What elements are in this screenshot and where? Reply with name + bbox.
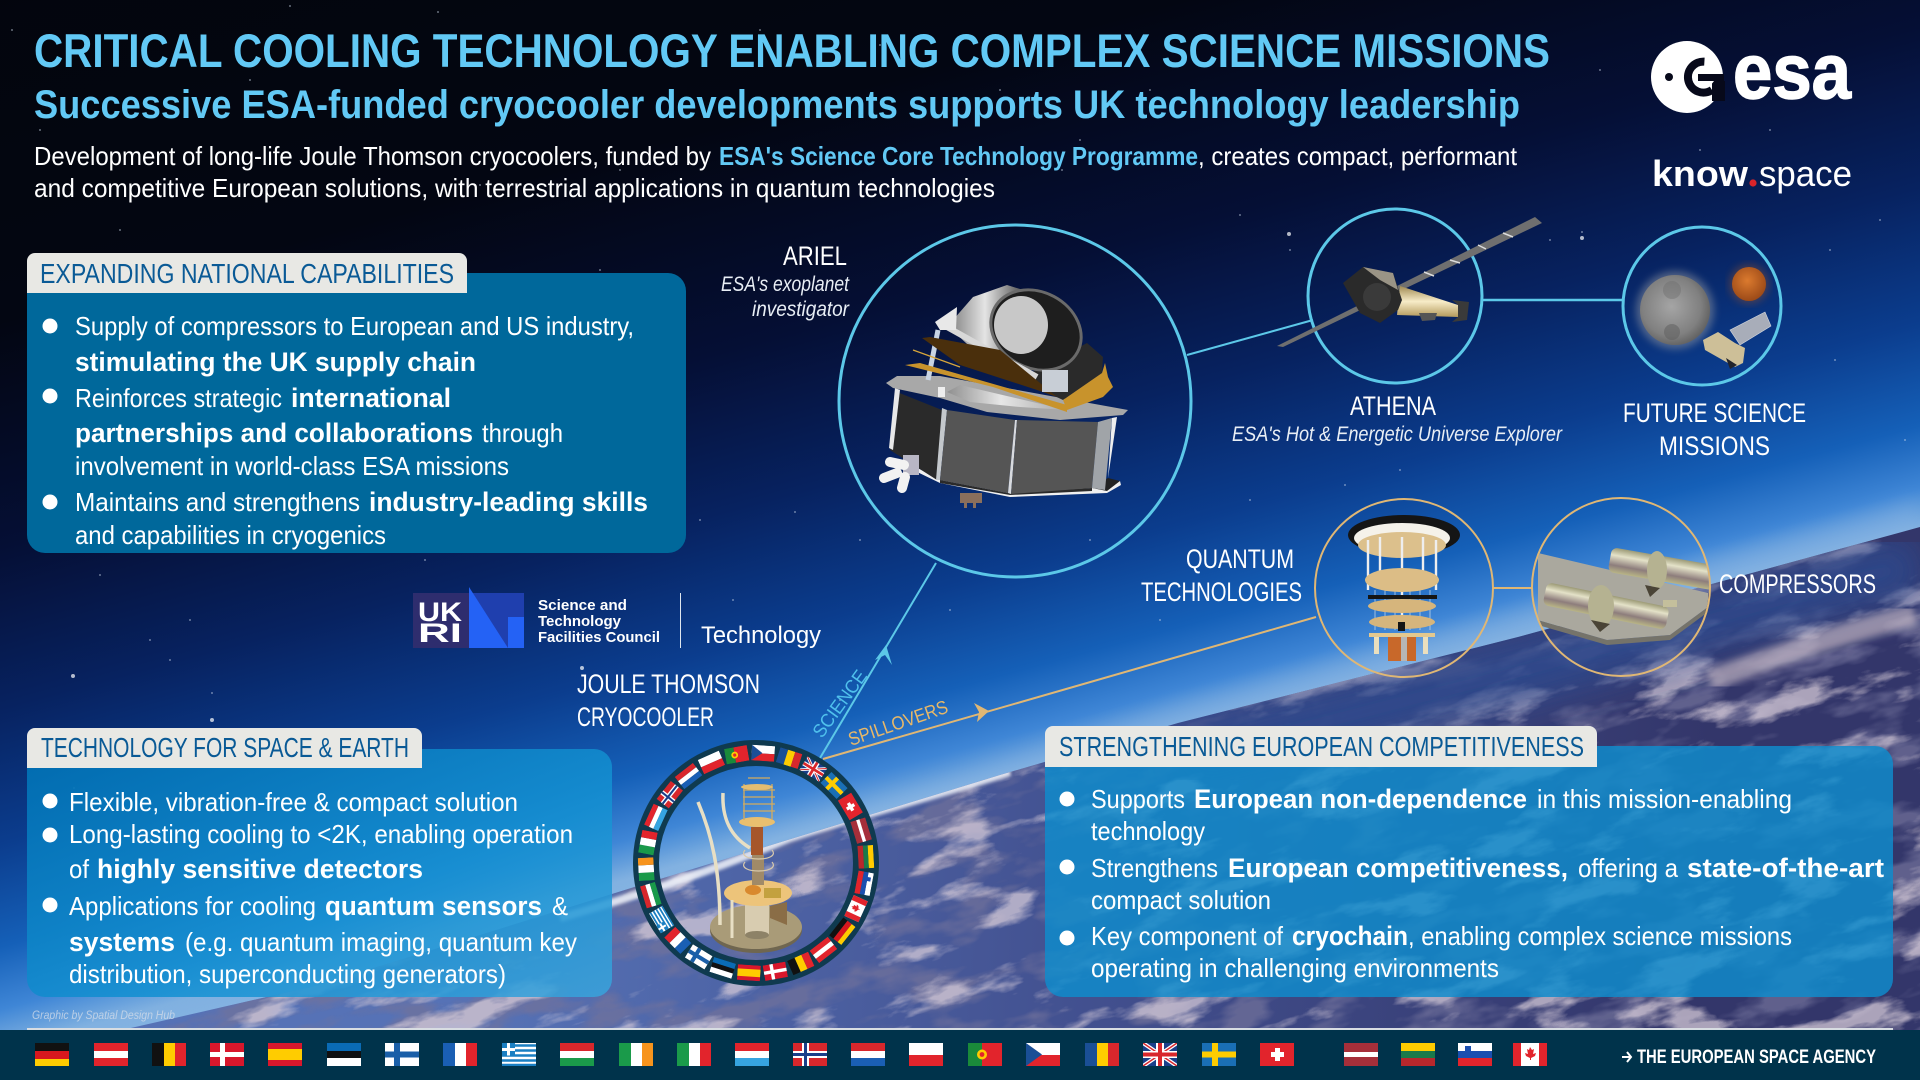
bullet list: operating in challenging environments <box>1091 953 1499 983</box>
bullet list: distribution, superconducting generators) <box>69 959 506 989</box>
arrow: science <box>809 563 936 758</box>
Ariel telescope <box>905 274 1113 412</box>
heading tab: strengthening european competitiveness <box>1045 726 1597 767</box>
title: CRITICAL COOLING TECHNOLOGY ENABLING COMPLEX SCIENCE MISSIONS <box>34 24 1550 77</box>
footer flags <box>35 1043 1547 1066</box>
panel: technology for space and earth <box>27 728 612 997</box>
bullet list: systems <box>69 927 175 957</box>
footer bar <box>0 1028 1920 1080</box>
bullet list: compact solution <box>1091 885 1271 915</box>
logo: UKRI STFC: Technology <box>701 622 821 649</box>
bullet list: , enabling complex science missions <box>1408 921 1792 951</box>
bullet list: partnerships and collaborations <box>75 418 473 448</box>
bullet list: state-of-the-art <box>1687 853 1884 883</box>
bullet list: of <box>69 854 90 884</box>
label: future science missions <box>1623 398 1806 461</box>
Athena telescope <box>1343 267 1469 323</box>
heading tab: expanding national capabilities <box>27 253 467 293</box>
heading tab: technology for space and earth <box>27 728 422 768</box>
intro paragraph: , creates compact, performant <box>1198 141 1518 171</box>
arrow: spillovers: SPILLOVERS <box>846 697 951 751</box>
logo: UKRI STFC: UK <box>418 597 463 627</box>
bullet list: Reinforces strategic <box>75 383 282 413</box>
logo: UKRI STFC: RI <box>418 618 462 648</box>
circle: compressors <box>1532 498 1720 676</box>
Ariel body <box>884 376 1128 508</box>
logo: ESA <box>1651 27 1852 115</box>
bullet list <box>42 311 648 550</box>
dilution refrigerator <box>1348 515 1460 661</box>
label: Athena <box>1232 391 1563 446</box>
arrow: spillovers <box>823 617 1316 759</box>
intro paragraph: ESA's Science Core Technology Programme <box>719 141 1198 171</box>
bullet list: international <box>291 383 451 413</box>
bullet list: Supports <box>1091 784 1185 814</box>
panel: strengthening european competitiveness <box>1045 726 1893 997</box>
logo: know.space: know <box>1652 153 1749 194</box>
bullet list: & <box>552 891 568 921</box>
label: quantum technologies: QUANTUM <box>1186 544 1294 574</box>
bullet list: cryochain <box>1292 921 1408 951</box>
bullet list: through <box>482 418 563 448</box>
connector: quantum to compressors <box>1493 587 1532 589</box>
intro paragraph: and competitive European solutions, with terrestrial applications in quantum technologies <box>34 173 995 203</box>
compressor assembly <box>1538 547 1720 645</box>
label: Joule Thomson cryocooler: JOULE THOMSON <box>577 669 760 699</box>
bullet list: Long-lasting cooling to <2K, enabling operation <box>69 819 573 849</box>
circle: quantum technologies <box>1315 499 1493 677</box>
bullet list <box>42 787 577 989</box>
circle: Ariel spacecraft <box>839 225 1191 577</box>
lander spacecraft <box>1703 312 1771 369</box>
label: Ariel: ESA's exoplanet <box>721 273 850 296</box>
circle: Athena spacecraft <box>1277 209 1542 383</box>
label: Athena: ESA's Hot & Energetic Universe Explorer <box>1232 423 1563 446</box>
Mars <box>1729 264 1769 304</box>
connector: Ariel to Athena <box>1187 320 1313 355</box>
bullet list: technology <box>1091 816 1205 846</box>
bullet list: Key component of <box>1091 921 1284 951</box>
logo: UKRI STFC: Facilities Council <box>538 629 660 646</box>
logo: UKRI STFC: Science and <box>538 597 627 614</box>
bullet list: offering a <box>1578 853 1678 883</box>
label: Ariel: investigator <box>752 298 850 321</box>
bullet list: quantum sensors <box>325 891 542 921</box>
label: quantum technologies <box>1141 544 1302 607</box>
bullet list: Applications for cooling <box>69 891 316 921</box>
intro paragraph: Development of long-life Joule Thomson cryocoolers, funded by <box>34 141 711 171</box>
circle: future science missions <box>1623 227 1781 385</box>
label: future science missions: FUTURE SCIENCE <box>1623 398 1806 428</box>
heading tab: expanding national capabilities: EXPANDING NATIONAL CAPABILITIES <box>40 258 454 289</box>
Athena solar panels <box>1277 217 1542 347</box>
logo: UKRI STFC <box>413 587 821 649</box>
label: quantum technologies: TECHNOLOGIES <box>1141 577 1302 607</box>
subtitle: Successive ESA-funded cryocooler developments supports UK technology leadership <box>34 83 1520 127</box>
label: future science missions: MISSIONS <box>1659 431 1770 461</box>
logo: ESA: esa <box>1733 27 1852 115</box>
panel: expanding national capabilities <box>27 253 686 553</box>
label: Ariel: ARIEL <box>783 241 847 271</box>
bullet list: Flexible, vibration-free & compact solution <box>69 787 518 817</box>
label: Ariel <box>721 241 850 321</box>
arrow: science: SCIENCE <box>809 666 872 742</box>
label: Joule Thomson cryocooler: CRYOCOOLER <box>577 702 714 732</box>
heading tab: technology for space and earth: TECHNOLOGY FOR SPACE & EARTH <box>41 732 409 763</box>
bullet list: Maintains and strengthens <box>75 487 360 517</box>
bullet list: involvement in world-class ESA missions <box>75 451 509 481</box>
intro paragraph <box>34 141 1518 203</box>
bullet list: industry-leading skills <box>369 487 648 517</box>
moon <box>1636 271 1714 349</box>
credit: Graphic by Spatial Design Hub <box>32 1008 175 1022</box>
bullet list: European competitiveness, <box>1228 853 1568 883</box>
logo: UKRI STFC: Technology <box>538 613 622 630</box>
bullet list: highly sensitive detectors <box>97 854 423 884</box>
ring of member-state flags <box>638 745 874 981</box>
bullet list: and capabilities in cryogenics <box>75 520 386 550</box>
bullet list: (e.g. quantum imaging, quantum key <box>185 927 577 957</box>
heading tab: strengthening european competitiveness: STRENGTHENING EUROPEAN COMPETITIVENESS <box>1059 731 1584 762</box>
logo: know.space: space <box>1759 153 1852 194</box>
logo: know.space <box>1652 153 1852 194</box>
connector: Athena to future missions <box>1482 299 1623 301</box>
bullet list: European non-dependence <box>1194 784 1527 814</box>
bullet list <box>1060 784 1884 983</box>
label: Joule Thomson cryocooler <box>577 669 760 732</box>
bullet list: stimulating the UK supply chain <box>75 347 476 377</box>
label: Athena: ATHENA <box>1350 391 1436 421</box>
bullet list: Supply of compressors to European and US industry, <box>75 311 634 341</box>
bullet list: in this mission-enabling <box>1537 784 1792 814</box>
Joule Thomson cryocooler device <box>698 778 802 953</box>
bullet list: Strengthens <box>1091 853 1218 883</box>
